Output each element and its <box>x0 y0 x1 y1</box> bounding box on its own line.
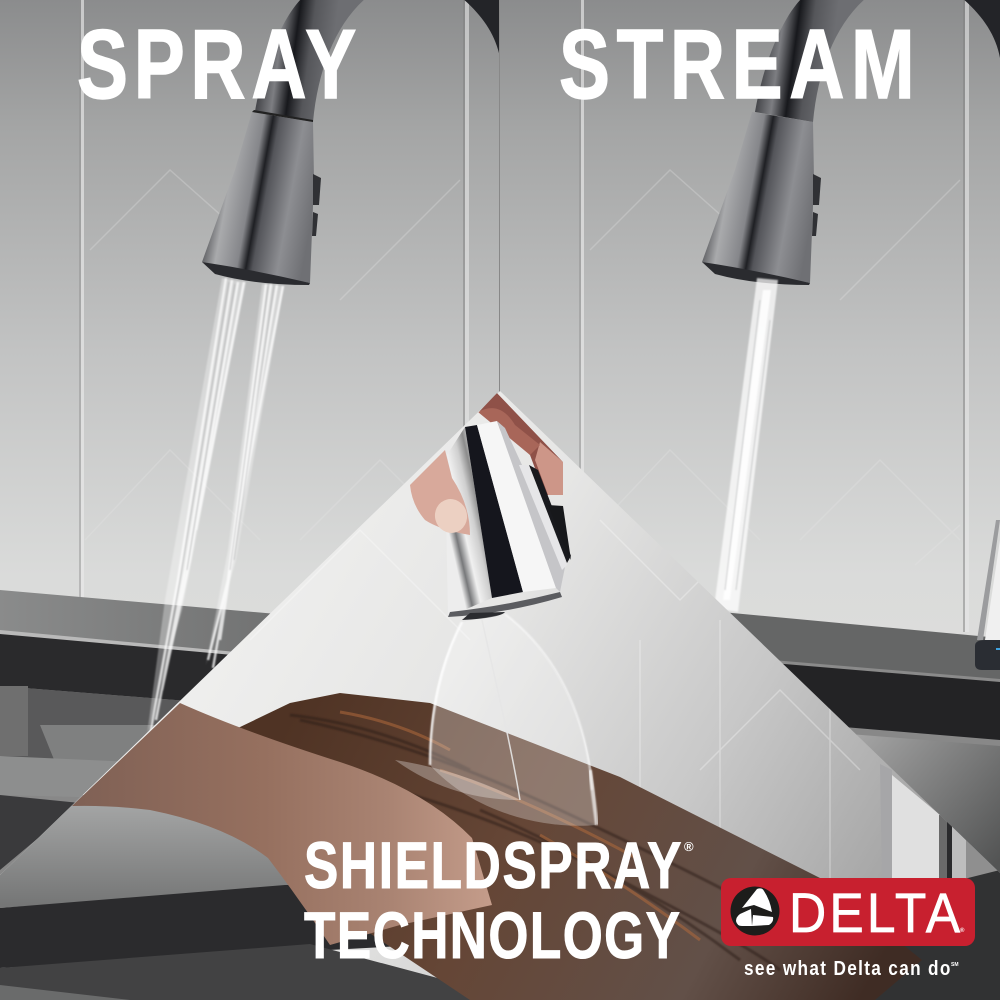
heading: shieldspray: SHIELDSPRAY <box>304 828 682 902</box>
faucet reflection <box>875 764 1000 1000</box>
hand holding board <box>72 703 492 945</box>
panel: spray <box>0 0 500 870</box>
soap dispenser <box>975 520 1000 670</box>
faucet <box>702 0 1000 285</box>
countertop <box>730 612 1000 872</box>
registered mark: ® <box>684 839 694 854</box>
heading: stream: STREAM <box>559 9 915 119</box>
service mark: SM <box>951 962 958 968</box>
heading: spray: SPRAY <box>77 9 356 119</box>
panel: shieldspray <box>0 390 1000 1000</box>
panel: stream <box>500 0 1000 900</box>
upper fingers <box>478 393 563 495</box>
finger <box>410 450 471 537</box>
logo emblem <box>730 886 780 936</box>
spray water <box>147 278 284 735</box>
spray head body <box>445 421 571 620</box>
tagline: see what Delta can do <box>744 957 950 979</box>
faucet <box>202 0 500 285</box>
delta logo <box>721 878 975 946</box>
logo registered mark: ® <box>960 927 965 934</box>
stream water <box>714 278 778 612</box>
cutting board <box>238 693 922 1000</box>
countertop <box>0 590 300 870</box>
water shield dome <box>395 614 597 826</box>
heading: technology: TECHNOLOGY <box>304 898 680 972</box>
logo wordmark: DELTA <box>789 882 960 944</box>
dark countertop <box>0 795 520 1000</box>
